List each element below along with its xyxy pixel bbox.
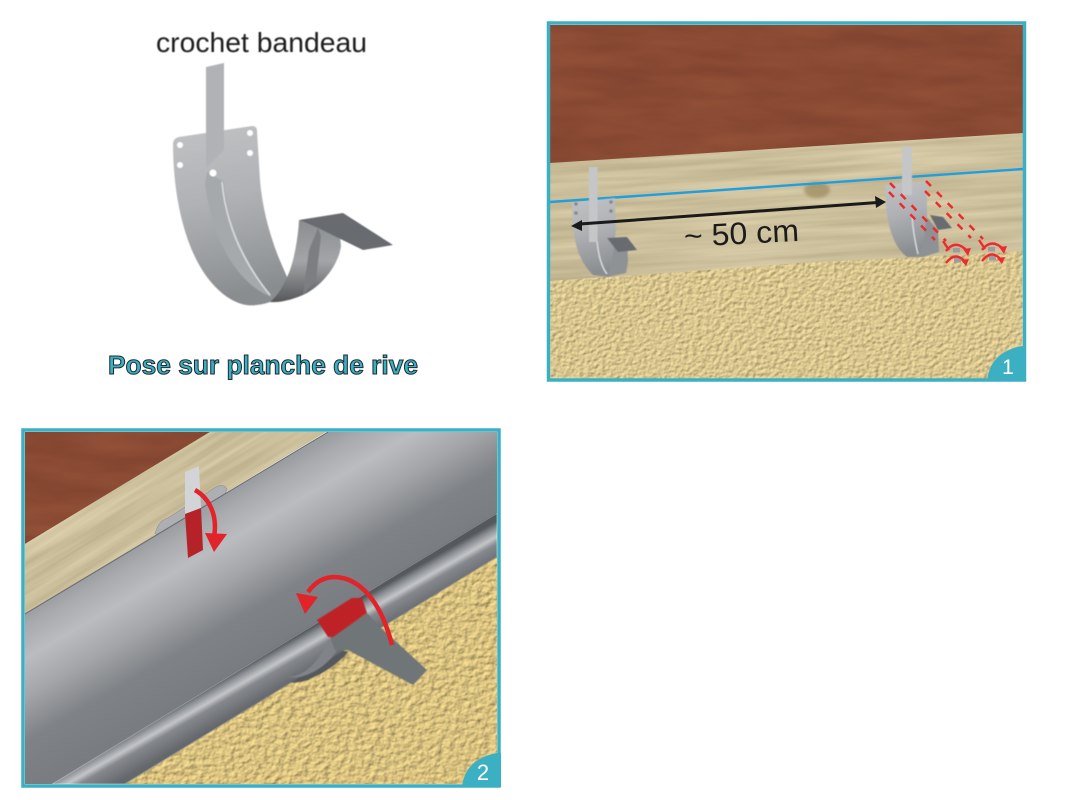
roof fascia [25, 432, 215, 547]
illustration: gutter hook [173, 63, 393, 305]
spacing label: ~ 50 cm [683, 213, 800, 254]
subtitle: pose sur planche de rive: Pose sur planche de rive [108, 352, 418, 380]
gutter front bead [52, 513, 497, 784]
gutter body [25, 432, 497, 784]
red strap end [185, 508, 203, 558]
spacing arrow [571, 196, 886, 231]
fixing holes in hook plate [177, 130, 253, 176]
red band on bead [317, 598, 367, 637]
hook plate behind gutter [155, 485, 227, 537]
hook underside [290, 650, 348, 684]
panel 2 border [23, 430, 499, 786]
red arrow: strap fold [195, 490, 227, 552]
wood board [550, 133, 1023, 282]
panel 2: folding tabs [21, 428, 501, 788]
red arrow tips [961, 246, 1007, 266]
roof fascia [550, 25, 1023, 165]
badge 2 [462, 753, 501, 787]
red arrow: tab fold [296, 577, 392, 645]
panel 1: hook spacing [525, 23, 1056, 381]
red dashed fold guides [889, 181, 983, 241]
right hook [885, 147, 952, 257]
rough wall [120, 550, 500, 785]
panel 1 border [548, 23, 1024, 380]
left hook [572, 167, 637, 277]
red rotation arrows [943, 240, 1004, 263]
hook bulge [290, 646, 336, 678]
badge 2: 2 [477, 760, 489, 785]
gutter upper edge [25, 432, 328, 614]
title: crochet bandeau: crochet bandeau [156, 27, 367, 58]
rough wall [550, 245, 1023, 379]
blue chalk line [550, 169, 1023, 202]
badge 1 [987, 346, 1026, 381]
upper strap [185, 466, 201, 514]
wood board [25, 432, 326, 614]
badge 1: 1 [1002, 356, 1014, 379]
lower tab [330, 613, 427, 685]
screws [953, 247, 996, 262]
